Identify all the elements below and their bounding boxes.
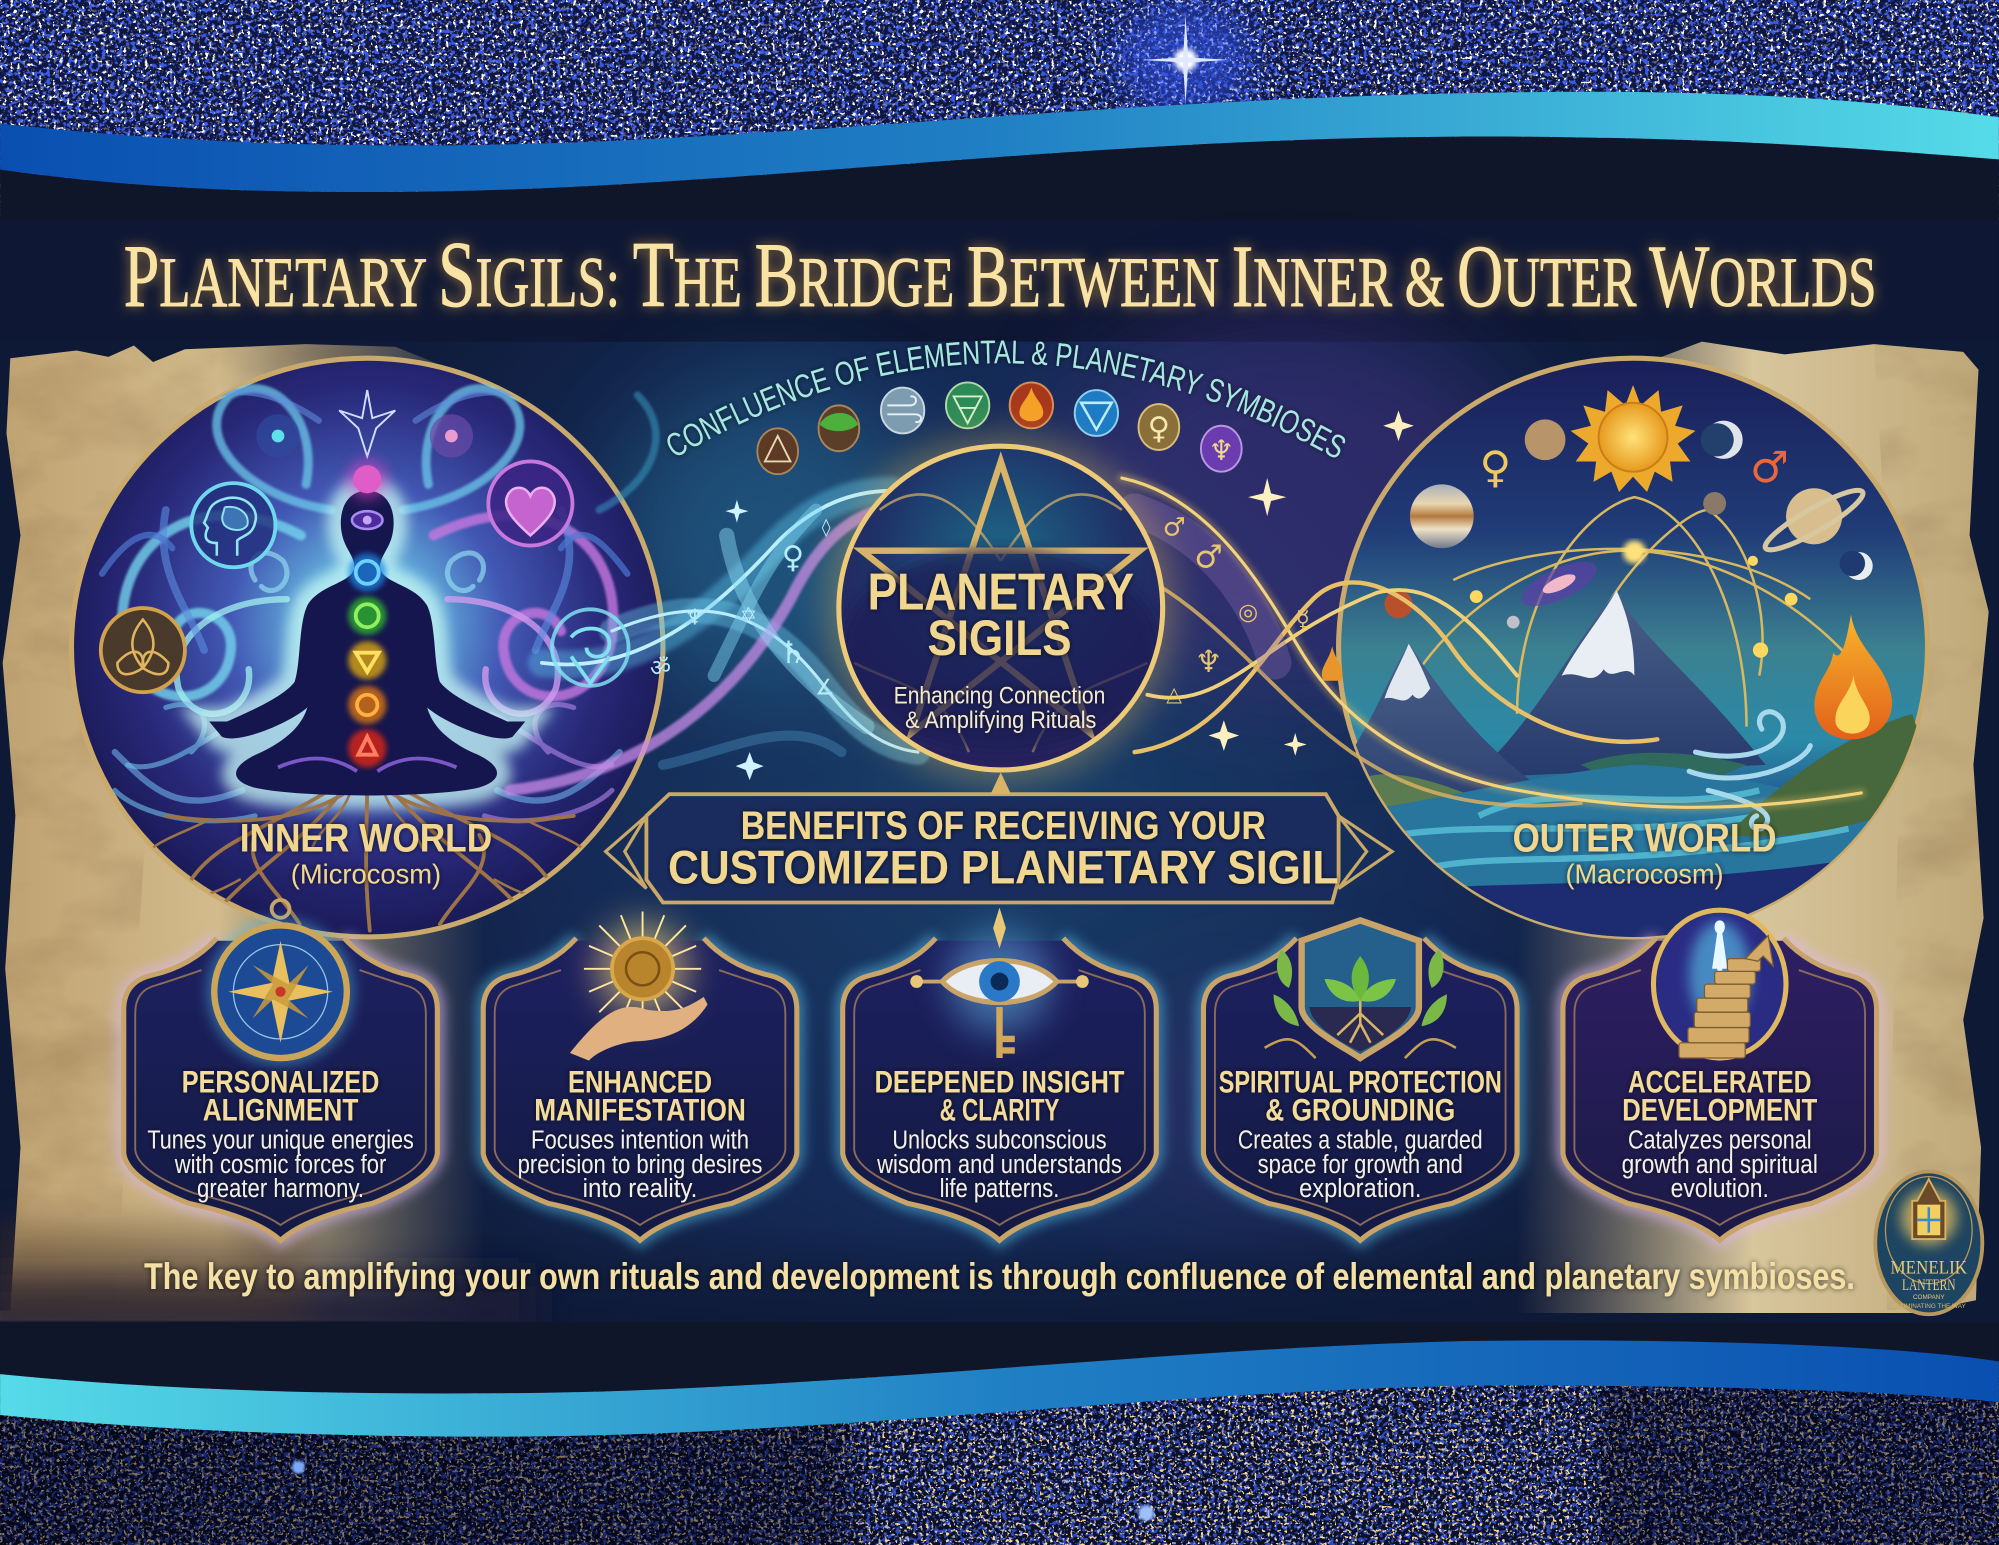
banner line two: CUSTOMIZED PLANETARY SIGIL	[668, 840, 1339, 893]
icon: stairway portal	[1653, 910, 1786, 1058]
icon: symbols along the ribbons: ♆	[685, 606, 705, 631]
card body: greater harmony.	[197, 1175, 364, 1203]
card: spiritual protection and grounding	[1203, 920, 1517, 1240]
top wave	[0, 92, 1999, 192]
icon: symbols along the ribbons: ✡	[740, 603, 757, 627]
card heading line one: SPIRITUAL PROTECTION	[1219, 1063, 1502, 1099]
icon: crown sigil	[339, 390, 395, 456]
card body: Tunes your unique energies	[147, 1127, 414, 1155]
constellation nodes	[1470, 492, 1797, 658]
icon: spiral sigil on ribbon	[552, 609, 629, 686]
meditating figure	[209, 491, 525, 795]
icon: symbols along the ribbons: △	[1166, 682, 1182, 706]
planets	[1384, 419, 1873, 618]
card heading line one: DEEPENED INSIGHT	[875, 1063, 1125, 1099]
chakras	[347, 459, 388, 767]
heading: sigils line: SIGILS	[927, 610, 1072, 666]
icon: wind	[1689, 712, 1810, 829]
card body: Creates a stable, guarded	[1238, 1127, 1483, 1155]
artwork panel	[0, 221, 1999, 1322]
confluence arc heading: CONFLUENCE OF ELEMENTAL & PLANETARY SYMBIOSES	[665, 339, 1348, 460]
card body	[1238, 1127, 1483, 1203]
icon: small orbs	[256, 414, 473, 458]
sun	[1571, 385, 1696, 492]
card body: wisdom and understands	[876, 1151, 1122, 1179]
card: deepened insight and clarity	[843, 908, 1156, 1240]
arrow: cyan ribbons inner to centre	[510, 395, 918, 790]
icon: galaxy	[1516, 553, 1603, 615]
bright star	[1142, 15, 1229, 105]
icon: triquetra	[101, 608, 185, 692]
icon: earth triangle	[946, 382, 989, 428]
icon: fire	[1814, 614, 1892, 739]
icon: neptune token: ♆	[1209, 434, 1234, 467]
icon: symbols along the ribbons: ∠	[815, 676, 835, 701]
card heading line two: DEVELOPMENT	[1622, 1092, 1818, 1128]
mountains	[1339, 590, 1766, 848]
card body: with cosmic forces for	[174, 1151, 387, 1179]
logo: Menelik Lantern Company: LANTERN	[1902, 1277, 1956, 1294]
logo: Menelik Lantern Company: MENELIK	[1891, 1257, 1967, 1278]
card body: growth and spiritual	[1622, 1151, 1818, 1179]
icon: glowing seal in hand	[570, 911, 708, 1061]
icon: shield with plant	[1265, 920, 1456, 1058]
card body: evolution.	[1671, 1175, 1769, 1203]
icon: venus token: ♀	[1148, 412, 1170, 447]
card heading line one: PERSONALIZED	[182, 1063, 379, 1099]
roots	[152, 794, 582, 932]
card body	[518, 1127, 762, 1203]
icon: symbols along the ribbons: ☿	[1296, 607, 1310, 633]
logo: Menelik Lantern Company	[1875, 1171, 1982, 1314]
icon: symbols along the ribbons	[650, 512, 1343, 706]
icon: symbols along the ribbons: ♂	[1163, 512, 1186, 542]
sparkle stars	[725, 410, 1414, 780]
planetary symbols: ♀	[1480, 443, 1511, 493]
icon: water	[1075, 390, 1118, 436]
land	[1727, 714, 1938, 837]
energy swirls	[102, 388, 627, 821]
title: PLANETARY SIGILS: THE BRIDGE BETWEEN INNER & OUTER WORLDS	[124, 223, 1877, 327]
card body	[876, 1127, 1122, 1203]
icon: heart	[488, 461, 572, 546]
heading: planetary sigils: PLANETARY	[868, 563, 1134, 621]
label: macrocosm: (Macrocosm)	[1565, 858, 1724, 889]
constellation arcs	[1415, 497, 1874, 727]
icon: air	[881, 388, 924, 433]
icon: eye and key	[910, 908, 1089, 1058]
arrow: golden ribbons centre to outer	[1109, 478, 1861, 807]
card body: into reality.	[583, 1175, 697, 1203]
card body: Focuses intention with	[531, 1127, 749, 1155]
icon: symbols along the ribbons: ♂	[1194, 537, 1223, 575]
icon: symbols along the ribbons: ♄	[779, 636, 807, 671]
icon: symbols along the ribbons: ♀	[782, 540, 804, 575]
card: enhanced manifestation	[483, 911, 797, 1240]
legs detail	[278, 758, 456, 771]
benefits banner	[606, 772, 1392, 903]
card body: space for growth and	[1258, 1151, 1463, 1179]
card heading line two: MANIFESTATION	[534, 1092, 746, 1128]
logo: Menelik Lantern Company: ILLUMINATING THE WAY	[1892, 1303, 1967, 1310]
planetary symbols	[1480, 443, 1789, 493]
card heading line two: & CLARITY	[940, 1092, 1059, 1128]
card body: Catalyzes personal	[1628, 1127, 1812, 1155]
icon: venus token	[1138, 404, 1179, 450]
icon: fire	[1010, 382, 1053, 428]
icon: symbols along the ribbons: ॐ	[650, 656, 671, 682]
subtitle line one: Enhancing Connection	[894, 683, 1105, 710]
planetary symbols: ♂	[1750, 443, 1789, 493]
icon: symbols along the ribbons: ◊	[822, 517, 831, 538]
logo: Menelik Lantern Company: COMPANY	[1913, 1294, 1945, 1301]
icon: brain	[191, 483, 275, 567]
banner line one: BENEFITS OF RECEIVING YOUR	[741, 804, 1266, 848]
label: microcosm: (Microcosm)	[291, 858, 441, 889]
water	[1326, 765, 1938, 969]
card body: life patterns.	[940, 1175, 1059, 1203]
label: inner world: INNER WORLD	[240, 817, 492, 861]
card body: Unlocks subconscious	[892, 1127, 1107, 1155]
element tokens row	[757, 382, 1242, 474]
card body: precision to bring desires	[518, 1151, 762, 1179]
aura glow	[209, 491, 525, 795]
bottom wave	[0, 1340, 1999, 1437]
card: accelerated development	[1563, 910, 1877, 1240]
icon: earth	[818, 405, 859, 451]
panel: outer world	[1326, 358, 1938, 969]
card heading line two: ALIGNMENT	[203, 1092, 359, 1128]
parchment left	[0, 344, 535, 1351]
icon: neptune token	[1201, 426, 1242, 472]
panel: central sigil	[827, 435, 1174, 781]
parchment right	[1504, 342, 1989, 1313]
icon: spirit triangle	[757, 428, 798, 474]
label: outer world: OUTER WORLD	[1513, 817, 1776, 861]
subtitle line two: & Amplifying Rituals	[905, 707, 1096, 734]
icon: pentagram	[841, 461, 1160, 752]
card: personalized alignment	[124, 900, 437, 1240]
card body	[1622, 1127, 1818, 1203]
icon: symbols along the ribbons: ◎	[1238, 600, 1258, 626]
card body: exploration.	[1299, 1175, 1421, 1203]
card heading line two: & GROUNDING	[1265, 1092, 1455, 1128]
card heading line one: ENHANCED	[568, 1063, 712, 1099]
icon: symbols along the ribbons: ♆	[1195, 645, 1222, 680]
card heading line one: ACCELERATED	[1628, 1063, 1812, 1099]
panel: inner world	[71, 358, 663, 937]
card body	[147, 1127, 414, 1203]
icon: compass	[207, 900, 354, 1066]
